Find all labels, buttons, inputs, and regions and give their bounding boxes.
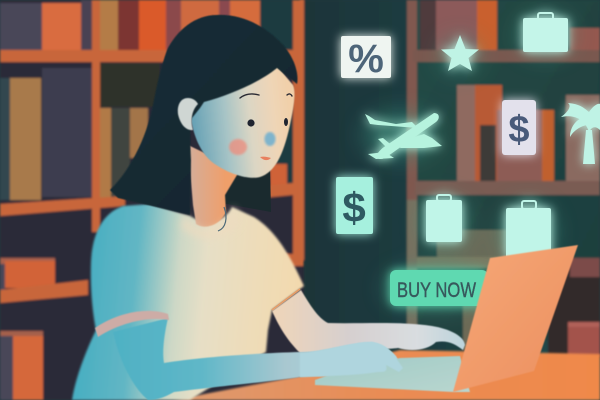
front hand on keyboard: [300, 342, 403, 377]
necklace: [218, 207, 226, 231]
eyebrows: [240, 94, 292, 98]
mouth: [260, 157, 271, 160]
nose: [264, 132, 276, 146]
left sleeve hem: [95, 311, 169, 337]
icon: palm tree: [561, 103, 600, 164]
lower left books and boxes: [0, 258, 55, 400]
icon: dollar tag right: [502, 100, 536, 155]
button: buy now: [390, 270, 488, 306]
icon: shopping bag small: [426, 195, 462, 242]
icon: shopping bag large: [506, 201, 551, 258]
right sleeve hem: [272, 289, 300, 310]
icon: dollar tag left: [336, 177, 373, 234]
button: buy now: BUY NOW: [397, 279, 476, 302]
keyboard base: [315, 356, 470, 392]
neck: [188, 145, 240, 227]
icon: airplane: [365, 113, 442, 159]
woman: [72, 15, 465, 400]
icon: briefcase: [523, 13, 568, 52]
icon: dollar tag left: $: [342, 184, 366, 231]
table: [173, 350, 600, 400]
icon: dollar tag right: $: [508, 109, 530, 151]
icon: star: [441, 35, 479, 71]
right forearm: [272, 290, 465, 353]
shelf boards and uprights: [0, 0, 304, 303]
blush: [229, 139, 247, 155]
icon: percent tag: %: [348, 37, 384, 81]
icon: percent tag: [341, 36, 391, 81]
background left bookshelf: [0, 0, 305, 400]
top row books: [0, 0, 293, 50]
second row books: [0, 63, 293, 200]
collar shading: [180, 206, 240, 239]
left arm: [113, 318, 403, 400]
laptop: [315, 245, 578, 392]
eyes: [247, 118, 288, 127]
face: [190, 66, 294, 178]
back hair: [215, 150, 271, 212]
ear: [178, 98, 198, 130]
background dark wall and right bookshelf: [300, 0, 600, 400]
shirt: [72, 204, 304, 400]
front hair: [110, 15, 298, 215]
icon glow haze: [364, 15, 571, 308]
lid: [453, 245, 578, 392]
